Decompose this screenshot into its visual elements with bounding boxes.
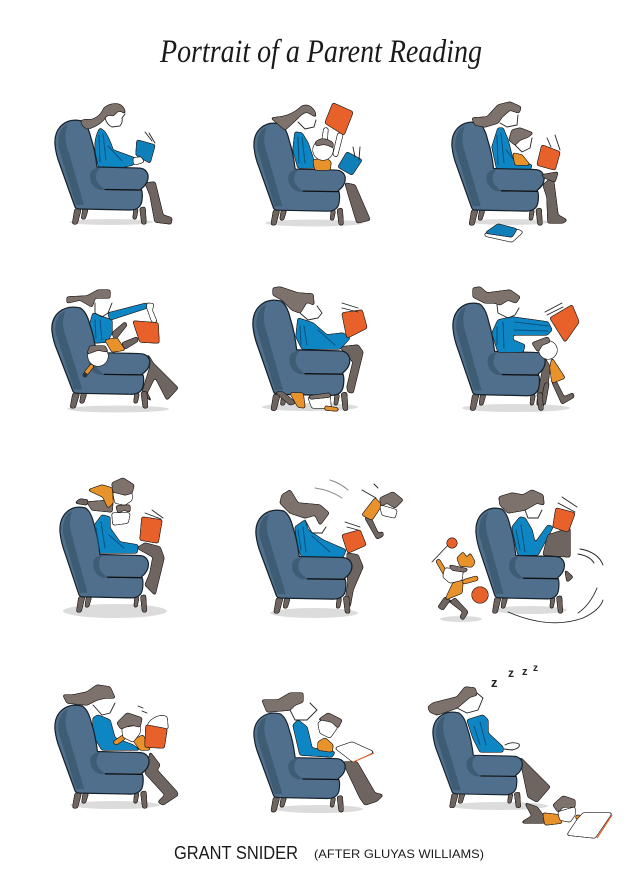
hand <box>133 157 144 165</box>
child legs <box>522 803 545 823</box>
hair <box>280 490 329 525</box>
child body <box>543 813 562 825</box>
child arms <box>436 559 478 584</box>
face <box>298 120 316 129</box>
hair <box>271 105 316 130</box>
child head <box>539 341 557 359</box>
orange book <box>145 725 167 748</box>
orange book <box>140 517 162 543</box>
child hair <box>315 139 333 148</box>
panel 1: parent reading alone <box>55 104 172 225</box>
book cover edge <box>353 753 374 762</box>
child face <box>380 505 397 518</box>
child arms <box>362 484 378 498</box>
child legs <box>275 392 296 405</box>
child body <box>445 580 463 600</box>
torso <box>95 128 135 168</box>
orange book <box>550 305 579 342</box>
face <box>457 693 483 713</box>
stripes <box>298 527 330 552</box>
torso <box>467 715 503 752</box>
title: Portrait of a Parent Reading <box>159 34 482 70</box>
child hand <box>82 372 88 378</box>
hair <box>63 685 115 705</box>
snore letters: z <box>508 666 514 680</box>
pages <box>547 135 560 150</box>
legs <box>543 176 567 223</box>
orange book <box>133 321 159 343</box>
child legs <box>541 381 574 405</box>
armchair <box>453 303 545 410</box>
child hair <box>380 492 403 508</box>
parent leg <box>537 358 550 407</box>
child legs <box>438 597 468 620</box>
book cover edge <box>597 815 612 838</box>
hair <box>81 104 125 129</box>
floor shadow <box>275 805 363 813</box>
orange book <box>342 310 367 338</box>
armchair <box>254 713 345 812</box>
panel 2: child holds up a book <box>254 103 370 226</box>
panel 10: child snuggled with the book <box>55 685 178 809</box>
face <box>300 306 322 320</box>
child hair <box>309 393 330 399</box>
floor shadow <box>70 801 160 809</box>
child body <box>88 485 113 508</box>
duster <box>447 538 457 548</box>
child arm <box>113 735 126 745</box>
parent fringe <box>116 505 130 513</box>
face <box>95 303 112 317</box>
snore letters: z <box>533 663 538 674</box>
child leg <box>75 499 88 505</box>
child face <box>122 725 140 742</box>
armchair <box>476 508 564 613</box>
armchair <box>55 120 148 224</box>
legs <box>340 345 363 393</box>
torso <box>296 318 350 349</box>
armchair <box>253 300 350 410</box>
floor shadow <box>69 219 153 225</box>
stripes <box>298 137 305 163</box>
child hair <box>117 713 142 729</box>
legs <box>543 528 570 557</box>
face <box>290 703 317 720</box>
floor shadow <box>470 219 550 225</box>
open book on floor <box>567 813 612 838</box>
face <box>93 703 115 715</box>
legs <box>145 182 172 224</box>
surprise marks <box>138 706 147 713</box>
child hair <box>87 346 108 354</box>
pages <box>345 522 360 530</box>
face <box>500 115 518 127</box>
torso <box>89 313 112 343</box>
armchair <box>55 705 149 808</box>
panel 5: child under the chair <box>253 287 367 411</box>
stripes <box>300 326 335 345</box>
child face <box>515 138 532 152</box>
book pages edge <box>485 229 523 242</box>
book <box>136 140 155 163</box>
child arm <box>576 815 589 820</box>
child dress <box>550 358 565 383</box>
legs <box>142 353 178 402</box>
face <box>525 510 542 518</box>
face <box>105 114 125 127</box>
panel 6: child pushing from below the book <box>453 287 579 412</box>
snore letters <box>491 663 538 690</box>
child arm <box>84 364 94 375</box>
orange book <box>342 530 366 553</box>
motion lines <box>315 480 348 498</box>
arms and torso <box>492 317 552 352</box>
legs <box>145 752 178 805</box>
face <box>497 305 519 318</box>
armchair <box>52 307 150 408</box>
legs <box>343 762 383 805</box>
legs <box>345 553 363 607</box>
credit: after: (AFTER GLUYAS WILLIAMS) <box>314 847 484 861</box>
parent hair <box>87 500 113 512</box>
floor shadow <box>265 220 363 226</box>
motion arcs <box>508 549 603 623</box>
floor shadow <box>67 406 169 412</box>
panel 4: child hanging off the chair arm <box>52 290 178 412</box>
legs <box>345 183 370 223</box>
pages <box>145 132 155 143</box>
face <box>443 568 463 583</box>
pages <box>342 303 358 312</box>
child head <box>308 395 331 408</box>
panel 11: parent and child with open book <box>254 693 383 813</box>
floor shadow <box>262 403 358 411</box>
floor shadow <box>270 608 358 618</box>
child arms <box>322 128 343 157</box>
upper leg <box>541 172 558 182</box>
orange book <box>537 145 560 170</box>
torso <box>492 128 532 170</box>
torso <box>93 715 140 750</box>
floor shadow <box>452 802 548 810</box>
panel 9: child with crown and duster, chair spinning <box>432 490 603 623</box>
hair <box>473 287 520 305</box>
stripes <box>95 320 102 340</box>
torso <box>293 720 335 757</box>
child body <box>105 338 125 352</box>
panel 12: parent asleep, child reading on floor <box>428 663 612 838</box>
hair <box>273 287 314 313</box>
parent face <box>112 513 130 525</box>
torso <box>293 132 315 168</box>
stripes <box>99 134 122 162</box>
floor shadow <box>493 606 567 614</box>
pages <box>145 510 163 519</box>
hand <box>504 743 519 750</box>
child shadow <box>440 616 482 622</box>
orange book <box>325 103 353 135</box>
child hair <box>318 713 342 728</box>
child body <box>290 393 305 408</box>
stripes <box>96 522 124 548</box>
armchair <box>60 507 148 612</box>
pages <box>353 147 360 160</box>
child hair <box>112 478 134 495</box>
child hair <box>449 565 468 572</box>
stripes <box>497 133 518 165</box>
hair <box>499 490 544 513</box>
torso <box>93 515 138 553</box>
stripes <box>516 525 525 552</box>
bag <box>472 587 488 603</box>
dropped blue book <box>485 224 517 237</box>
panel 3: child on lap, blue book on the floor <box>452 102 567 242</box>
child legs <box>365 516 383 539</box>
child legs <box>112 322 138 349</box>
child arm <box>325 406 338 411</box>
duster stick <box>432 543 450 562</box>
child hair <box>509 128 533 145</box>
snore letters: z <box>522 666 528 678</box>
orange book <box>553 508 575 532</box>
child face <box>318 718 340 738</box>
child head <box>313 140 333 160</box>
torso <box>512 517 553 555</box>
stripes <box>474 722 486 745</box>
torso <box>295 520 346 557</box>
child body <box>313 158 331 170</box>
panel 7: child on the parent's head <box>60 478 167 618</box>
child hair <box>553 796 575 812</box>
hair <box>67 290 110 307</box>
child body <box>318 738 333 752</box>
foot <box>565 570 573 582</box>
floor shadow <box>462 404 570 412</box>
hair <box>472 102 521 127</box>
armchair <box>256 510 352 613</box>
armchair <box>452 122 544 225</box>
panel 8: child bouncing in the air <box>256 480 403 618</box>
child face <box>113 492 132 505</box>
child body <box>513 153 530 165</box>
stripes <box>497 322 548 348</box>
blue book <box>338 152 362 175</box>
legs <box>520 757 550 802</box>
snore letters: z <box>491 675 498 690</box>
child face <box>558 807 575 822</box>
credit: author: GRANT SNIDER <box>174 843 298 863</box>
pages <box>147 716 168 729</box>
pages <box>558 497 577 512</box>
child hair <box>532 337 550 352</box>
floor shadow <box>63 604 167 618</box>
crown <box>457 552 475 567</box>
child head <box>88 346 108 366</box>
child body <box>133 735 150 750</box>
child body <box>362 498 382 520</box>
pages <box>545 303 563 315</box>
hair <box>428 687 477 715</box>
face <box>305 520 326 533</box>
armchair <box>433 712 522 808</box>
legs <box>137 543 164 595</box>
raised arm <box>108 303 147 320</box>
forearm <box>147 303 157 322</box>
open book <box>335 742 374 762</box>
hair <box>262 693 303 712</box>
armchair <box>254 123 345 225</box>
